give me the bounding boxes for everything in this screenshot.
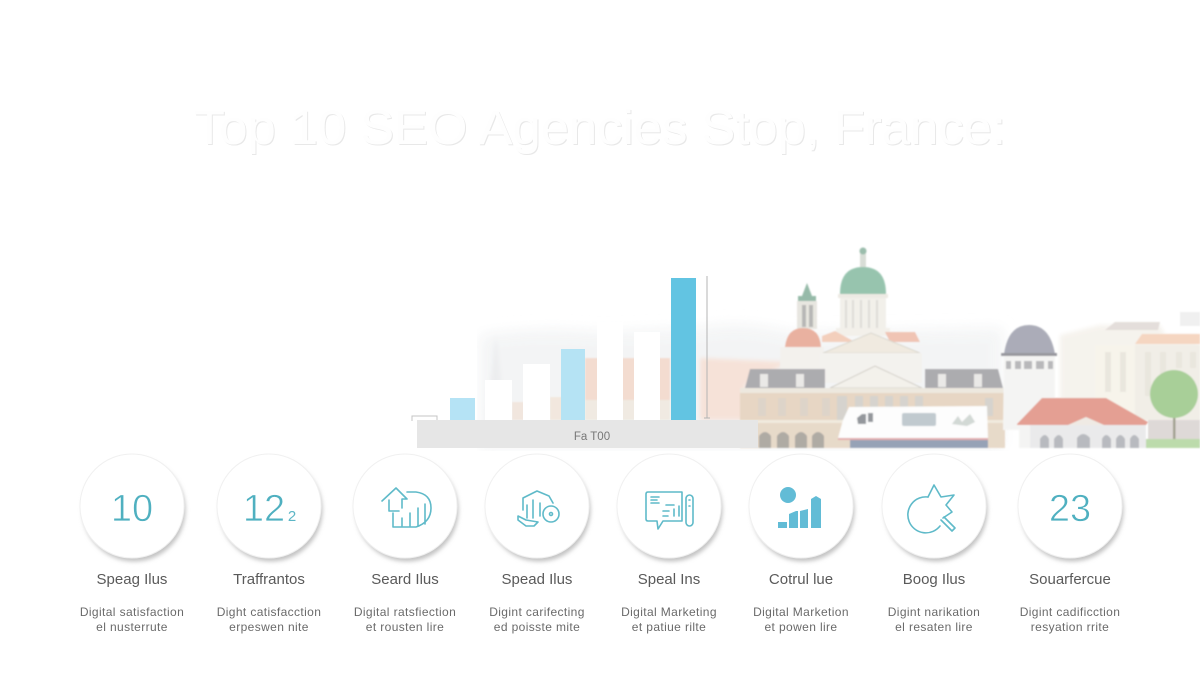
upper pediment: [820, 333, 922, 383]
item 8: Digint cadificction: [1020, 605, 1120, 619]
chart base with label: [417, 420, 758, 448]
icon: dot and bars: [778, 487, 821, 528]
item 3: [353, 454, 458, 634]
icon: hexagon chart with clock: [518, 491, 559, 526]
item 2: Traffrantos: [233, 571, 305, 588]
item 4: Spead Ilus: [502, 571, 572, 588]
chart axis: [704, 276, 710, 418]
item 1: el nusterrute: [96, 620, 168, 634]
item 2: 12: [243, 488, 285, 530]
small tower with red dome: [780, 283, 920, 370]
icon: chat bubble with chart: [646, 492, 693, 529]
tree: [1146, 370, 1200, 448]
red roof house: [1017, 398, 1148, 448]
item 2: 2: [288, 508, 296, 525]
title: Top 10 SEO Agencies Stop, France:: [194, 102, 1006, 155]
round tower: [1001, 325, 1057, 448]
item 1: [80, 454, 186, 634]
item 5: et patiue rilte: [632, 620, 706, 634]
item 4: ed poisste mite: [494, 620, 580, 634]
item 8: resyation rrite: [1031, 620, 1109, 634]
bars: [450, 278, 696, 420]
chart base with label: Fa T00: [574, 431, 610, 443]
item 3: Digital ratsfiection: [354, 605, 456, 619]
item 6: Digital Marketion: [753, 605, 849, 619]
item 3: et rousten lire: [366, 620, 444, 634]
bus: [838, 406, 988, 448]
item 8: [1018, 454, 1124, 634]
icon: house with chart: [382, 488, 431, 527]
icon: star magnifier: [908, 485, 955, 533]
item 1: Speag Ilus: [97, 571, 167, 588]
item 1: Digital satisfaction: [80, 605, 184, 619]
item 6: Cotrul lue: [769, 571, 833, 588]
item 2: erpeswen nite: [229, 620, 309, 634]
item 6: et powen lire: [765, 620, 837, 634]
main palace: [740, 366, 1005, 448]
item 7: el resaten lire: [895, 620, 973, 634]
item 6: [749, 454, 854, 634]
item 1: 10: [111, 488, 153, 530]
item 8: Souarfercue: [1029, 571, 1111, 588]
bar chart: [412, 276, 758, 448]
item 2: Dight catisfacction: [217, 605, 321, 619]
buildings behind the chart: [512, 358, 790, 420]
item 5: Digital Marketing: [621, 605, 717, 619]
item 4: Digint carifecting: [489, 605, 585, 619]
palace arches: [759, 432, 824, 448]
distant hills: [480, 325, 1003, 448]
cityscape illustration: [480, 248, 1200, 448]
item 7: Boog Ilus: [903, 571, 965, 588]
item 5: [617, 454, 722, 634]
item 7: Digint narikation: [888, 605, 980, 619]
item 2: [217, 454, 322, 634]
right background buildings: [1060, 312, 1200, 440]
central dome: [836, 248, 890, 336]
item 4: [485, 454, 590, 634]
title: Top 10 SEO Agencies Stop, France:: [195, 103, 1007, 156]
item 7: [882, 454, 988, 634]
item 3: Seard Ilus: [371, 571, 439, 588]
item 8: 23: [1049, 488, 1091, 530]
item 5: Speal Ins: [638, 571, 700, 588]
